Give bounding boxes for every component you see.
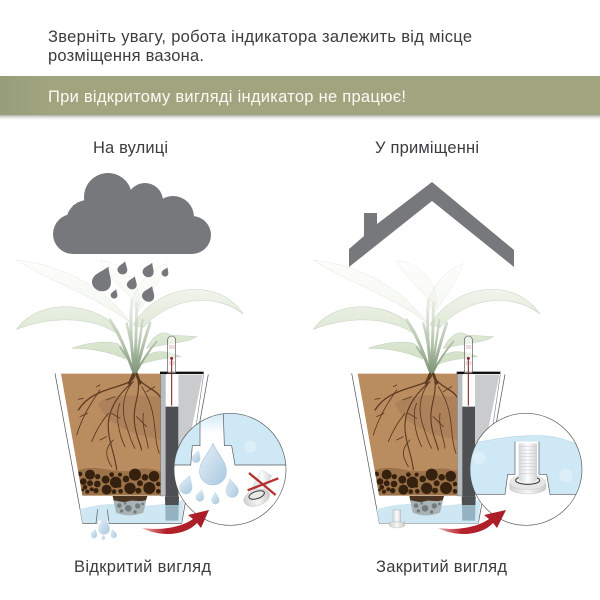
detail circle: closed drain xyxy=(468,413,585,525)
intro text xyxy=(48,28,472,65)
warning band: При відкритому вигляді індикатор не працює! xyxy=(48,88,406,106)
caption: open view: Відкритий вигляд xyxy=(74,558,211,576)
icon: house roof xyxy=(349,182,514,267)
arrow: closed view xyxy=(438,510,506,534)
arrow: open view xyxy=(142,510,209,534)
intro text: Зверніть увагу, робота індикатора залежить від місце xyxy=(48,28,472,46)
heading: indoors: У приміщенні xyxy=(375,139,479,157)
warning band xyxy=(0,76,600,121)
icon: rain cloud xyxy=(53,173,211,304)
plant pot: closed view xyxy=(313,260,540,523)
detail circle: open drain xyxy=(172,412,288,525)
bolt plug: closed view xyxy=(389,510,405,528)
bolt xyxy=(510,443,546,494)
plant pot: open view xyxy=(17,260,243,523)
crossed-out bolt xyxy=(242,470,278,509)
caption: closed view: Закритий вигляд xyxy=(376,558,507,576)
heading: outdoors: На вулиці xyxy=(93,139,168,157)
intro text: розміщення вазона. xyxy=(48,47,204,65)
drain hole and water drops: open view xyxy=(83,509,182,540)
